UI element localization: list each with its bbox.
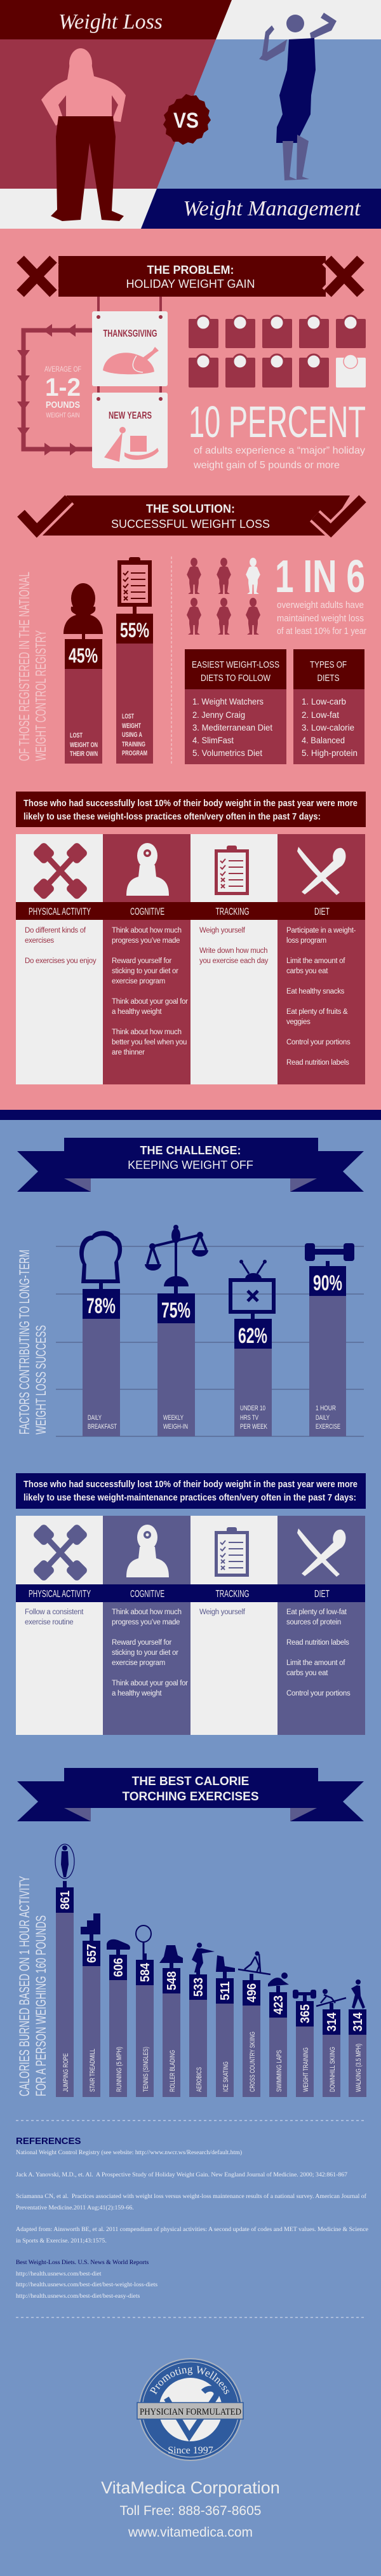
text: average 1-2 pounds: 1-2 <box>45 374 81 401</box>
panel: weight-maintenance practices grid: TRACKING <box>216 1589 249 1600</box>
stat: 10 percent <box>189 397 366 471</box>
card: thanksgiving: THANKSGIVING <box>103 328 157 339</box>
text: average 1-2 pounds: POUNDS <box>46 400 80 410</box>
tips: diet: Control your portions <box>286 1690 350 1697</box>
panel: weight-loss practices grid: PHYSICAL ACTIVITY <box>29 907 91 917</box>
table: types of diets: 5. High-protein <box>302 748 358 758</box>
calorie bar chart: RUNNING (5 MPH) <box>116 2047 123 2092</box>
icon: clipboard <box>215 846 249 895</box>
panel: weight-maintenance practices grid: COGNITIVE <box>130 1589 164 1600</box>
text: average 1-2 pounds: AVERAGE OF <box>44 365 81 374</box>
calorie bar chart: JUMPING ROPE <box>62 2053 70 2092</box>
tips: cognitive: Reward yourself for sticking to your diet or exercise program <box>112 957 178 985</box>
references: http://health.usnews.com/best-diet/best-easy-diets <box>16 2292 140 2300</box>
stat: 1 in 6: of at least 10% for 1 year <box>277 626 366 637</box>
vertical axis text: WEIGHT LOSS SUCCESS <box>33 1325 49 1434</box>
banner: the challenge <box>17 1138 364 1192</box>
table: easiest diets: 2. Jenny Craig <box>192 710 245 720</box>
man silhouette <box>259 13 337 180</box>
banner: the challenge: THE CHALLENGE: <box>140 1144 241 1157</box>
panel: weight-maintenance practices grid: DIET <box>314 1589 330 1600</box>
vertical axis text: WEIGHT CONTROL REGISTRY <box>32 630 49 761</box>
bar: 1 hour daily exercise 90%: DAILY <box>316 1414 330 1422</box>
tips: diet: Participate in a weight-loss program <box>286 927 356 945</box>
calorie bar chart: 657 <box>85 1944 99 1963</box>
hero: weight loss vs weight management <box>0 0 381 229</box>
calorie bar chart: AEROBICS <box>196 2067 203 2092</box>
logo: vitamedica seal: Promoting Wellness <box>150 2366 229 2395</box>
card: thanksgiving <box>92 297 168 386</box>
calorie bar chart: ICE SKATING <box>222 2061 230 2092</box>
tips: cognitive: Think about how much progress you’ve made <box>112 927 182 945</box>
stat: 1 in 6: overweight adults have <box>277 600 364 610</box>
calorie bar chart: 496 <box>245 1983 259 2002</box>
icon: dumbbells <box>32 842 88 900</box>
company contact: Toll Free: 888-367-8605 <box>119 2504 261 2518</box>
VS badge <box>163 94 211 145</box>
references: Adapted from: Ainsworth BE, et al. 2011 compendium of physical activities: A second update of codes and MET values. Medicine & Science in Sports & Exercise. 2011;43:1575. <box>16 2226 368 2244</box>
calorie bar chart: 365 <box>298 2004 312 2023</box>
bar: training program 55%: PROGRAM <box>122 750 147 757</box>
section: the challenge <box>16 1138 366 1509</box>
calorie bar chart: 511 <box>218 1981 232 2000</box>
bar: under 10 hrs tv 62%: 62% <box>238 1324 267 1348</box>
references: http://health.usnews.com/best-diet/best-weight-loss-diets <box>16 2281 157 2288</box>
bar: under 10 hrs tv 62%: PER WEEK <box>240 1423 267 1431</box>
bar: weekly weigh-in 75% <box>145 1225 208 1436</box>
tips: diet: Read nutrition labels <box>286 1059 349 1067</box>
panel: weight-loss practices grid: TRACKING <box>216 907 249 917</box>
icon: head with gear <box>126 843 169 896</box>
tips: diet <box>286 1608 351 1697</box>
tips: diet <box>286 927 356 1067</box>
panel: weight-loss practices grid: COGNITIVE <box>130 907 164 917</box>
tips: physical activity: Do different kinds of exercises <box>25 927 86 945</box>
bar: weekly weigh-in 75%: WEEKLY <box>163 1414 184 1422</box>
vertical axis text: FACTORS CONTRIBUTING TO LONG-TERM <box>17 1250 32 1434</box>
people icons 1 in 6 <box>187 558 260 635</box>
logo: vitamedica seal <box>137 2358 244 2461</box>
calorie bar chart: SWIMMING LAPS <box>276 2050 283 2092</box>
table: easiest diets: EASIEST WEIGHT-LOSS <box>192 659 279 670</box>
table: easiest diets: 3. Mediterranean Diet <box>192 722 272 732</box>
bar: training program 55% <box>116 557 153 764</box>
references: REFERENCES <box>16 2136 81 2147</box>
banner: best calorie torching exercises: THE BEST CALORIE <box>132 1775 249 1788</box>
tips: cognitive: Think about your goal for a healthy weight <box>112 1680 188 1697</box>
section: the problem <box>17 255 366 537</box>
tips: physical activity <box>25 927 97 965</box>
tips: physical activity: Follow a consistent exercise routine <box>25 1608 83 1626</box>
references: Jack A. Yanovski, M.D., et. Al. A Prospective Study of Holiday Weight Gain. New England Journal of Medicine. 2000; 342:861-867 <box>16 2171 347 2178</box>
references: Sciamanna CN, et al. Practices associated with weight loss versus weight-loss maintenance results of a national survey. American Journal of Preventative Medicine.2011 Aug;41(2):159-66. <box>16 2193 366 2211</box>
icon: knife and spoon <box>297 1528 345 1577</box>
panel: weight-maintenance practices grid <box>16 1516 365 1735</box>
calorie bar chart: TENNIS (SINGLES) <box>142 2047 150 2092</box>
stat: 10 percent: weight gain of 5 pounds or more <box>193 460 340 471</box>
references: http://health.usnews.com/best-diet <box>16 2270 101 2277</box>
bar: weekly weigh-in 75%: 75% <box>161 1298 190 1323</box>
bar: 1 hour daily exercise 90%: EXERCISE <box>316 1423 340 1431</box>
logo: vitamedica seal: PHYSICIAN FORMULATED <box>140 2407 241 2417</box>
arrow loop <box>17 324 92 455</box>
bar: daily breakfast 78%: BREAKFAST <box>88 1423 117 1431</box>
calorie bar chart <box>55 1844 366 2097</box>
callout: weight-loss practices: likely to use these weight-loss practices often/very often in the past 7 days: <box>23 811 321 822</box>
table: types of diets <box>293 649 364 764</box>
logo: vitamedica seal: Since 1997 <box>168 2445 213 2456</box>
bar: lost weight on their own 45%: 45% <box>69 644 98 667</box>
table: types of diets: 3. Low-calorie <box>302 722 354 732</box>
bar: training program 55%: 55% <box>120 619 149 642</box>
icon: dumbbells <box>32 1523 88 1582</box>
bar: 1 hour daily exercise 90%: 90% <box>313 1271 342 1295</box>
stat: 1 in 6: maintained weight loss <box>277 613 364 624</box>
tips: cognitive: Think about how much better you feel when you are thinner <box>112 1028 187 1056</box>
calorie bar chart: STAIR TREADMILL <box>89 2049 97 2092</box>
callout: maintenance practices <box>16 1473 366 1509</box>
calorie bar chart: 548 <box>165 1971 179 1990</box>
bar: lost weight on their own 45%: WEIGHT ON <box>70 741 98 749</box>
bar: 1 hour daily exercise 90% <box>305 1243 354 1436</box>
bar: training program 55%: LOST <box>122 713 134 720</box>
references: Best Weight-Loss Diets. U.S. News & World Reports <box>16 2259 149 2266</box>
banner: the problem: THE PROBLEM: <box>147 264 234 276</box>
table: easiest diets: 4. SlimFast <box>192 735 234 745</box>
tips: cognitive: Think about your goal for a healthy weight <box>112 998 188 1016</box>
table: easiest diets: 5. Volumetrics Diet <box>192 748 262 758</box>
tips: physical activity: Do exercises you enjoy <box>25 957 96 965</box>
card: new years: NEW YEARS <box>109 410 152 421</box>
woman silhouette <box>41 48 126 221</box>
panel: weight-maintenance practices grid: PHYSICAL ACTIVITY <box>29 1589 91 1600</box>
banner: the solution: THE SOLUTION: <box>146 502 235 515</box>
tips: cognitive <box>112 927 188 1056</box>
calorie bar chart: 606 <box>112 1958 126 1977</box>
tips: diet: Eat plenty of low-fat sources of protein <box>286 1608 347 1626</box>
tips: cognitive <box>112 1608 188 1697</box>
icon: knife and spoon <box>297 847 345 895</box>
tips: diet: Limit the amount of carbs you eat <box>286 957 345 975</box>
references: National Weight Control Registry (see website: http://www.nwcr.ws/Research/default.htm) <box>16 2149 242 2156</box>
calorie bar chart: 314 <box>351 2012 365 2032</box>
tips: tracking: Weigh yourself <box>199 1608 245 1616</box>
vertical axis text: FOR A PERSON WEIGHING 160 POUNDS <box>33 1915 49 2096</box>
stat: 1 in 6 <box>275 551 366 637</box>
vertical axis text <box>16 572 49 761</box>
table: easiest diets <box>185 649 286 764</box>
table: easiest diets: DIETS TO FOLLOW <box>201 673 271 684</box>
tips: diet: Control your portions <box>286 1039 350 1046</box>
panel: weight-loss practices grid: DIET <box>314 907 330 917</box>
icon: clipboard <box>215 1527 249 1577</box>
callout: weight-loss practices <box>16 792 366 827</box>
table: types of diets: 1. Low-carb <box>302 696 346 706</box>
bar: lost weight on their own 45% <box>64 583 103 764</box>
calorie bar chart: WALKING (3.5 MPH) <box>355 2044 363 2092</box>
bar: training program 55%: USING A <box>122 731 142 739</box>
bar: daily breakfast 78%: 78% <box>86 1294 116 1318</box>
vertical axis text <box>17 1250 49 1434</box>
divider <box>16 2317 364 2318</box>
calorie bar chart: 861 <box>58 1891 72 1910</box>
company contact: www.vitamedica.com <box>128 2525 253 2540</box>
table: types of diets: DIETS <box>318 673 339 684</box>
text: average 1-2 pounds: WEIGHT GAIN <box>46 412 80 419</box>
banner: the solution <box>21 496 363 536</box>
tips: diet: Eat plenty of fruits & veggies <box>286 1008 347 1026</box>
tips: cognitive: Think about how much progress you’ve made <box>112 1608 182 1626</box>
table: types of diets: 4. Balanced <box>302 735 345 745</box>
icon grid: scales <box>189 316 366 388</box>
banner: the solution: SUCCESSFUL WEIGHT LOSS <box>111 518 270 530</box>
calorie bar chart: 423 <box>272 1995 286 2014</box>
bar: daily breakfast 78% <box>79 1231 122 1436</box>
bar: daily breakfast 78%: DAILY <box>88 1414 102 1422</box>
section: solution stats <box>16 551 366 827</box>
calorie bar chart: WEIGHT TRAINING <box>302 2047 310 2092</box>
section: calorie torching exercises <box>16 1768 366 2121</box>
tips: diet: Read nutrition labels <box>286 1639 349 1647</box>
icon: head with gear <box>126 1525 169 1577</box>
company contact <box>101 2478 280 2540</box>
vertical axis text <box>17 1876 49 2096</box>
VS badge: VS <box>173 109 199 133</box>
bar: under 10 hrs tv 62%: UNDER 10 <box>240 1405 265 1412</box>
tips: tracking: Write down how much you exercise each day <box>199 947 268 965</box>
bar: under 10 hrs tv 62%: HRS TV <box>240 1414 258 1422</box>
vertical axis text: CALORIES BURNED BASED ON 1 HOUR ACTIVITY <box>17 1876 32 2096</box>
company contact: VitaMedica Corporation <box>101 2478 280 2497</box>
bar: weekly weigh-in 75%: WEIGH-IN <box>163 1423 188 1431</box>
bar: training program 55%: TRAINING <box>122 741 145 748</box>
bar: training program 55%: WEIGHT <box>122 722 141 730</box>
references <box>16 2136 368 2300</box>
calorie bar chart: 314 <box>325 2012 339 2032</box>
banner: the problem: HOLIDAY WEIGHT GAIN <box>126 278 255 290</box>
card: new years <box>92 386 168 468</box>
banner: best calorie torching exercises <box>17 1768 364 1821</box>
table: types of diets: TYPES OF <box>310 659 347 670</box>
banner: best calorie torching exercises: TORCHING EXERCISES <box>122 1790 259 1804</box>
title: weight loss: Weight Loss <box>58 10 163 34</box>
bar: under 10 hrs tv 62% <box>231 1260 274 1436</box>
exercise icons <box>55 1844 365 2009</box>
text: average 1-2 pounds <box>44 365 81 419</box>
bar: lost weight on their own 45%: LOST <box>70 732 83 739</box>
banner: the problem <box>20 256 361 297</box>
calorie bar chart: ROLLER BLADING <box>169 2050 177 2092</box>
calorie bar chart: CROSS COUNTRY SKIING <box>249 2032 257 2092</box>
title: weight management: Weight Management <box>183 197 361 220</box>
tips: cognitive: Reward yourself for sticking to your diet or exercise program <box>112 1639 178 1667</box>
panel: weight-loss practices grid <box>16 834 365 1084</box>
bar: lost weight on their own 45%: THEIR OWN <box>70 750 98 758</box>
table: easiest diets: 1. Weight Watchers <box>192 696 264 706</box>
tips: tracking: Weigh yourself <box>199 927 245 934</box>
tips: diet: Eat healthy snacks <box>286 988 344 995</box>
calorie bar chart: 584 <box>138 1962 152 1982</box>
calorie bar chart: 533 <box>192 1978 206 1997</box>
stat: 10 percent: of adults experience a “major” holiday <box>194 445 365 456</box>
calorie bar chart: DOWNHILL SKIING <box>329 2047 337 2092</box>
tips: diet: Limit the amount of carbs you eat <box>286 1659 345 1677</box>
tips: tracking <box>199 927 268 965</box>
table: types of diets: 2. Low-fat <box>302 710 339 720</box>
bar: 1 hour daily exercise 90%: 1 HOUR <box>316 1405 336 1412</box>
banner: the challenge: KEEPING WEIGHT OFF <box>128 1159 253 1171</box>
